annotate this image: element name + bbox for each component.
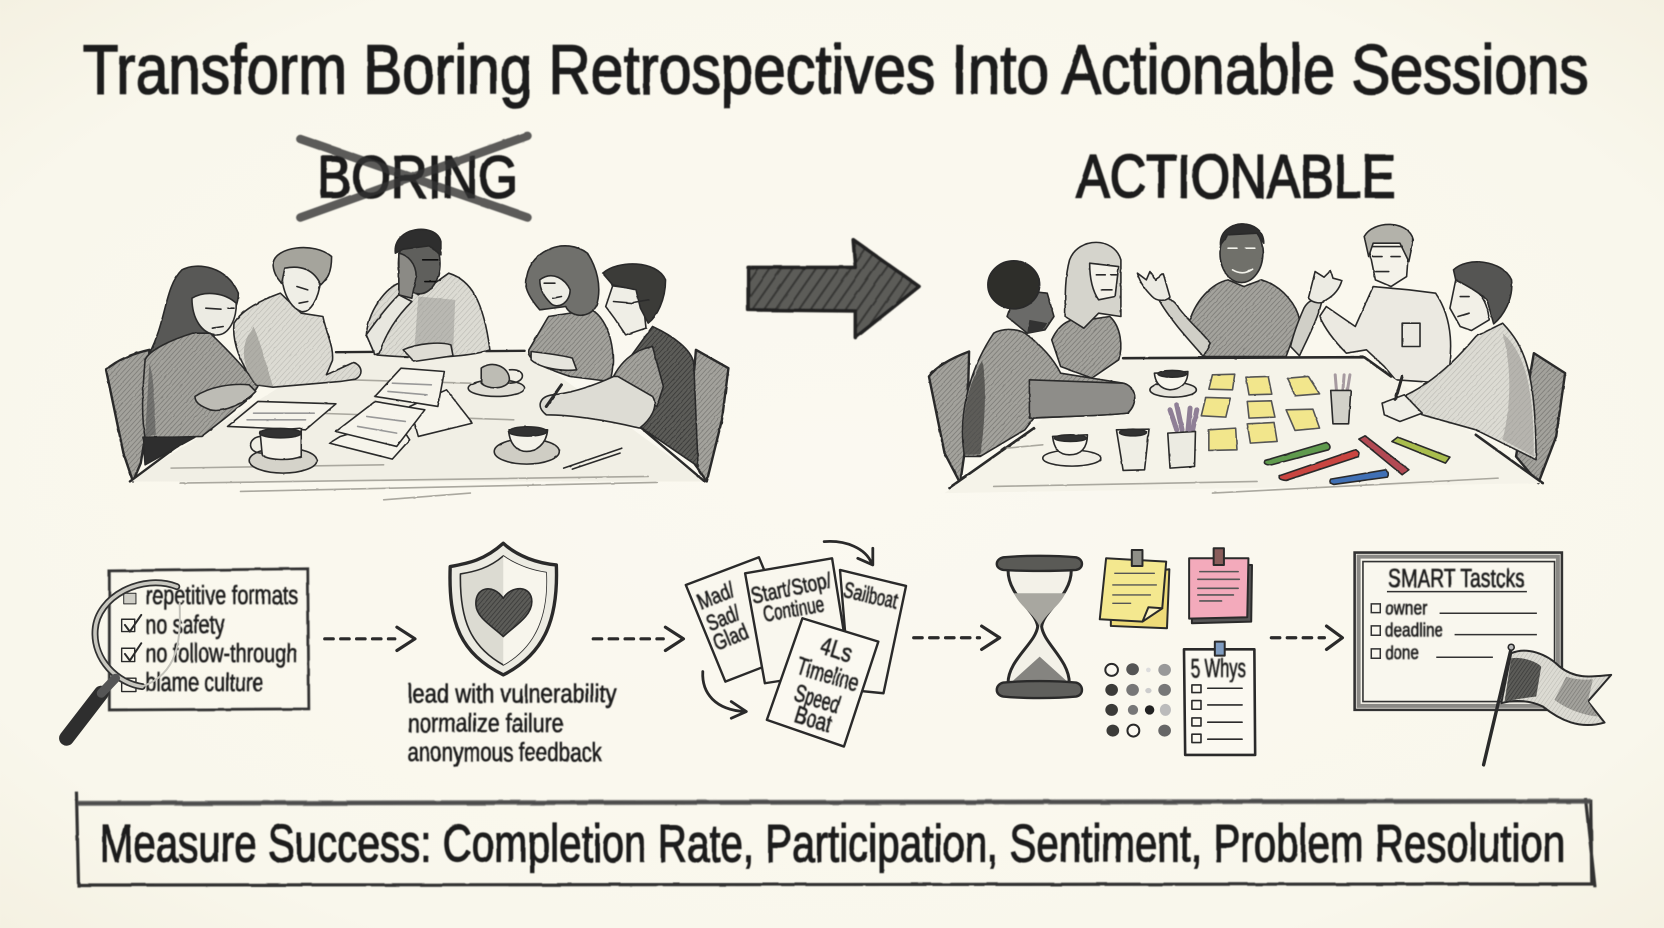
sticky notes bbox=[1201, 374, 1320, 450]
board text: owner bbox=[1385, 598, 1428, 619]
person: man with pen bbox=[1382, 262, 1536, 460]
person: woman with crossed arms bbox=[143, 266, 258, 465]
person: woman with wavy hair bbox=[526, 246, 613, 381]
board text: SMART Tastcks bbox=[1388, 565, 1525, 593]
card labels: Sad/ bbox=[703, 600, 744, 636]
icon: flag bbox=[1484, 644, 1611, 765]
heading: actionable: ACTIONABLE bbox=[1076, 142, 1395, 211]
icon: fanned cards bbox=[686, 541, 906, 747]
banner: measure success bbox=[76, 792, 1595, 887]
safety text: lead with vulnerability bbox=[408, 680, 617, 708]
arrow: step 3 to 4 bbox=[914, 626, 1000, 649]
card labels: Boat bbox=[791, 701, 835, 738]
panel: retro format cards bbox=[686, 541, 906, 747]
icon: hourglass, notes and dots bbox=[997, 548, 1255, 755]
arrow: step 1 to 2 bbox=[325, 627, 415, 651]
board text: done bbox=[1385, 643, 1419, 664]
person: tired man, hand on face bbox=[366, 229, 490, 361]
note label: 5 Whys bbox=[1191, 655, 1246, 683]
person: man looking down bbox=[234, 248, 361, 387]
problem list text: blame culture bbox=[145, 669, 263, 697]
card labels: Start/Stop/ bbox=[749, 567, 834, 609]
person: blonde woman bbox=[1052, 242, 1121, 378]
arrow: big hatched arrow bbox=[748, 240, 919, 337]
safety text: normalize failure bbox=[408, 710, 564, 738]
problem list text: repetitive formats bbox=[145, 582, 298, 610]
board text: deadline bbox=[1385, 621, 1443, 642]
safety text bbox=[408, 680, 617, 767]
panel: psychological safety bbox=[408, 543, 617, 767]
card labels: Continue bbox=[761, 592, 826, 627]
person: man with curly hair bbox=[963, 261, 1135, 456]
coffee cups bbox=[249, 364, 622, 473]
papers bbox=[228, 368, 473, 459]
card labels: Sailboat bbox=[841, 577, 901, 614]
problem list text bbox=[145, 582, 298, 697]
card labels: Timeline bbox=[793, 653, 862, 697]
person: man with glasses bbox=[540, 264, 698, 466]
icon: magnifying glass and checkboxes bbox=[67, 583, 180, 738]
panel: SMART tasks board bbox=[1355, 553, 1611, 765]
arrow: step 2 to 3 bbox=[593, 627, 683, 651]
person: speaker with raised hands bbox=[1137, 224, 1342, 356]
safety text: anonymous feedback bbox=[408, 739, 602, 767]
card labels bbox=[693, 567, 901, 738]
card labels: Speed bbox=[791, 680, 843, 719]
arrow: step 4 to 5 bbox=[1271, 626, 1342, 649]
card labels: Mad/ bbox=[693, 577, 739, 615]
panel: problems checklist bbox=[67, 569, 309, 738]
board frame bbox=[1355, 553, 1562, 710]
heading: boring crossed out bbox=[300, 136, 527, 218]
board text bbox=[1385, 565, 1525, 664]
illustration: bored team at table bbox=[106, 229, 728, 500]
problem list text: no follow-through bbox=[145, 640, 297, 668]
icon: shield with heart bbox=[450, 543, 557, 675]
card labels: 4Ls bbox=[817, 632, 856, 668]
problem list text: no safety bbox=[145, 612, 225, 640]
card labels: Glad bbox=[709, 619, 752, 656]
person: man in white shirt bbox=[1320, 224, 1451, 383]
heading: boring crossed out: BORING bbox=[317, 143, 518, 210]
illustration: engaged team at table bbox=[929, 224, 1565, 493]
table with notes and supplies bbox=[945, 357, 1543, 493]
panel: facilitation tools bbox=[997, 548, 1255, 755]
cups and pens bbox=[1043, 370, 1450, 484]
